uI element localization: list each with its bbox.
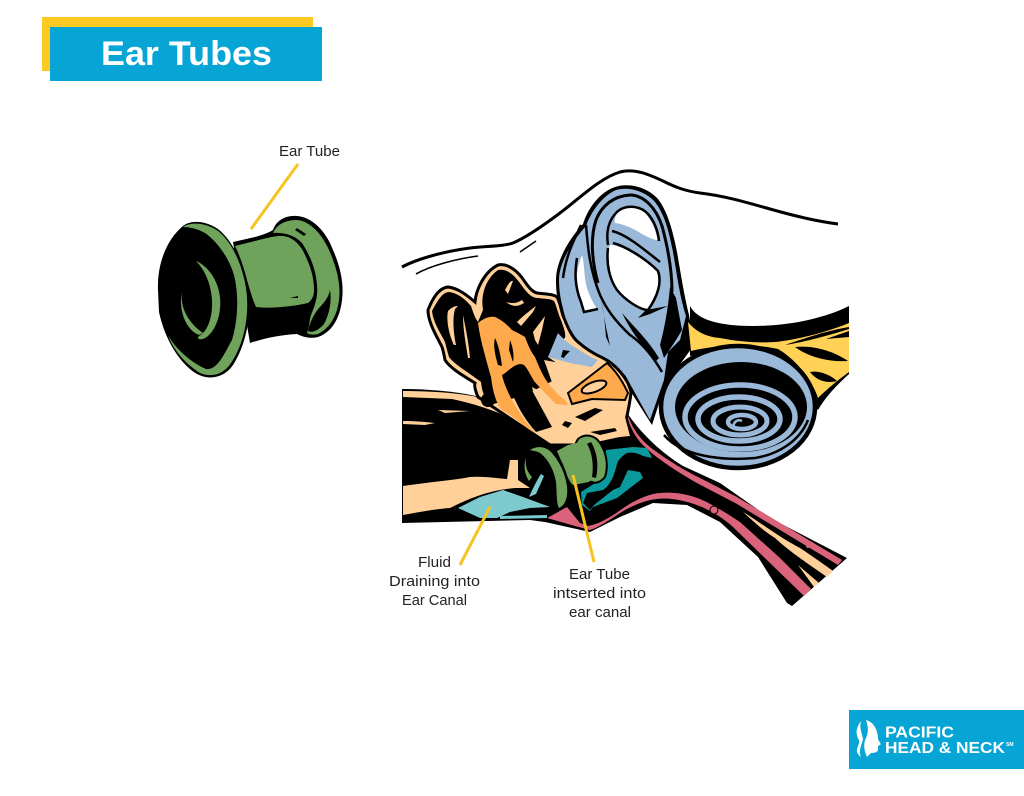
vestibule and canals (blue) [545, 185, 694, 425]
peach chamber [544, 360, 592, 394]
blue wedge [548, 333, 598, 367]
label: ear tube inserted into ear canal: intserted into [553, 585, 646, 602]
ossicles and outer structure [428, 265, 631, 445]
ear tube in place [525, 436, 607, 509]
cartilage highlights [505, 281, 545, 345]
stapes [568, 363, 628, 404]
label: fluid draining into ear canal: Fluid [418, 554, 451, 571]
fluid draining into ear canal [458, 490, 550, 519]
ear canal [402, 389, 560, 523]
label: ear tube: Ear Tube [279, 143, 340, 160]
cochlea [661, 346, 815, 468]
icon: enlarged ear tube [158, 216, 343, 377]
diagram: ear anatomy cross-section [402, 171, 849, 606]
label: ear tube inserted into ear canal [553, 566, 646, 621]
logo: pacific head and neck [849, 710, 1024, 769]
malleus body [508, 374, 552, 432]
leader line: ear tube inserted [573, 475, 594, 562]
label: ear tube inserted into ear canal: Ear Tube [569, 566, 630, 583]
canal arch strokes [592, 195, 672, 292]
teal middle ear cavity [581, 447, 652, 511]
label: ear tube inserted into ear canal: ear canal [569, 604, 631, 621]
logo: pacific head and neck: SM [1006, 742, 1014, 748]
label: fluid draining into ear canal: Draining into [389, 573, 480, 590]
nerve band [530, 405, 847, 606]
skull outline [402, 171, 838, 267]
icon: face profile [857, 720, 881, 757]
logo text: PACIFIC [885, 724, 954, 742]
orange ossicles [478, 317, 568, 433]
label: fluid draining into ear canal [389, 554, 480, 609]
logo: pacific head and neck: HEAD & NECK [885, 740, 1006, 757]
leader line: ear tube [251, 164, 298, 229]
title text: Ear Tubes [101, 35, 272, 73]
title banner [42, 17, 322, 81]
label: fluid draining into ear canal: Ear Canal [402, 592, 467, 609]
yellow bone [688, 306, 849, 410]
leader line: fluid [460, 507, 490, 565]
skull inner lines [416, 241, 536, 274]
